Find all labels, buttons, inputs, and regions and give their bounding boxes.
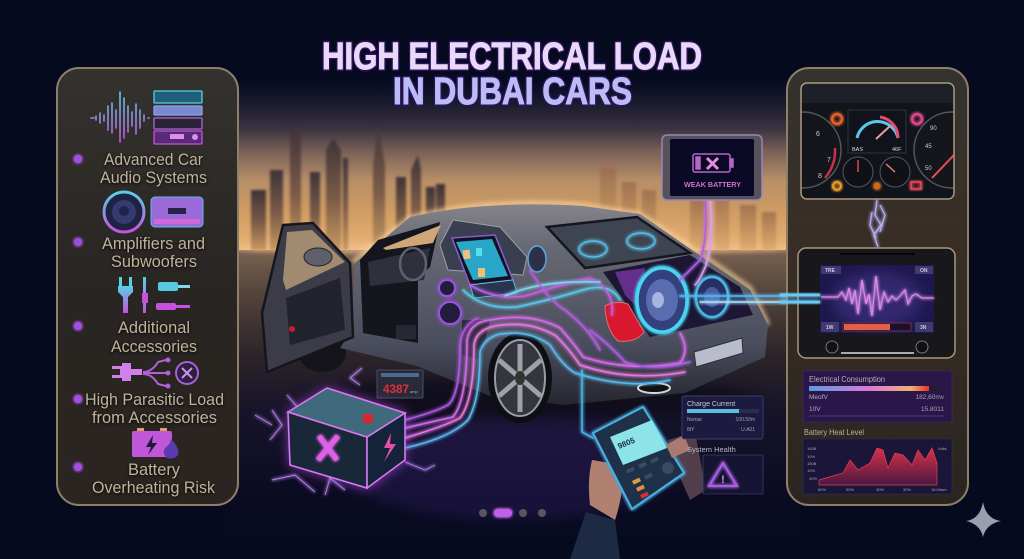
- instrument cluster: 90: [930, 126, 937, 132]
- progress bar: [843, 323, 911, 331]
- panel: causes list: [57, 68, 238, 505]
- electrical consumption card: Electrical Consumption: [809, 374, 885, 384]
- electric sparks: [255, 368, 435, 495]
- waveform: [821, 276, 934, 316]
- icon: sound wave: [91, 92, 149, 142]
- battery heat chart: 50%: [846, 487, 854, 492]
- watermark sparkle: [966, 502, 1001, 537]
- panel: dashboard diagnostics: [778, 67, 969, 506]
- car body: [340, 204, 768, 405]
- tool screen: [610, 420, 667, 465]
- icon: overheating battery: [132, 428, 178, 459]
- screen buttons: 3N: [920, 325, 927, 331]
- title: IN DUBAI CARS: [393, 71, 632, 113]
- windshield view: [383, 225, 441, 250]
- battery heat chart: 10%: [807, 454, 815, 459]
- label: battery overheating risk: [92, 460, 215, 497]
- label: battery overheating risk: Overheating Risk: [92, 478, 215, 497]
- charge current panel: U.A01: [741, 427, 755, 433]
- electrical consumption card: MeofV: [809, 394, 828, 401]
- tool body: [593, 407, 684, 509]
- door trim: [286, 278, 345, 345]
- battery heat heading: Battery Heat Level: [804, 428, 864, 437]
- left gauge: [802, 111, 842, 189]
- rear body glow: [353, 203, 768, 325]
- battery heat chart: 60%: [818, 487, 826, 492]
- warning lights: [832, 114, 842, 124]
- label: high parasitic load: [85, 390, 224, 427]
- label: high parasitic load: High Parasitic Load: [85, 390, 224, 409]
- head unit controls: [826, 341, 838, 353]
- electrical consumption card: 15.8011: [921, 406, 944, 413]
- battery heat chart: Volts: [938, 446, 947, 451]
- tablet screen: [452, 235, 517, 298]
- charge current panel: 8tY: [687, 427, 695, 433]
- diagnostic tool and hands: [570, 407, 706, 559]
- car battery: [255, 368, 435, 495]
- center console: [396, 325, 416, 339]
- system health panel: !: [721, 474, 725, 486]
- head unit screen: [820, 265, 934, 333]
- label: battery overheating risk: Battery: [128, 460, 180, 479]
- door lower interior: [462, 320, 490, 360]
- label: additional accessories: Accessories: [111, 337, 197, 356]
- battery heat chart: 10%: [807, 468, 815, 473]
- license plate: [694, 338, 743, 367]
- label: advanced car audio systems: Advanced Car: [104, 150, 203, 169]
- system health panel: System Health: [687, 445, 736, 454]
- battery case: [288, 412, 367, 488]
- screen buttons: 1W: [826, 325, 834, 331]
- title: HIGH ELECTRICAL LOAD: [322, 36, 702, 78]
- head unit: [798, 248, 955, 358]
- label: bullet 4: [74, 395, 82, 403]
- rear wheel: [488, 333, 552, 423]
- trunk opening: [603, 255, 753, 337]
- battery heat chart: 150B: [807, 461, 817, 466]
- exhaust: [638, 383, 670, 393]
- battery heat chart: 30%: [903, 487, 911, 492]
- instrument cluster: 8: [818, 173, 822, 180]
- trunk subwoofers: [637, 268, 728, 332]
- city skyline: [251, 122, 776, 250]
- label: amplifiers and subwoofers: [102, 234, 205, 271]
- lightning arc: [870, 200, 885, 247]
- diagnostic tool and hands: 9805: [616, 436, 637, 451]
- dashboard: [368, 248, 430, 286]
- electric beam: [780, 295, 820, 302]
- electrical consumption card: 10V: [809, 406, 821, 413]
- electrical consumption card: 182,60mv: [915, 394, 945, 401]
- icon: speaker: [104, 192, 144, 232]
- title: HIGH ELECTRICAL LOAD: [322, 36, 702, 78]
- battery heat chart: 40%: [809, 476, 817, 481]
- left hand: [589, 460, 623, 520]
- title: [322, 36, 702, 113]
- battery heat chart: 16:00am: [931, 487, 947, 492]
- lightning bolt: [384, 433, 396, 462]
- door speakers: [439, 280, 461, 324]
- voltage meter: [377, 370, 423, 398]
- icon: warning triangle: [709, 463, 737, 486]
- instrument cluster: BAS: [852, 147, 863, 153]
- thumb: [666, 435, 690, 458]
- battery heat chart: [803, 439, 952, 494]
- tool keypad: [626, 457, 674, 499]
- center display: [848, 110, 906, 153]
- screen buttons: TRE: [825, 268, 836, 274]
- open front door: [262, 223, 353, 372]
- charge current panel: Nomar: [687, 417, 702, 423]
- title: IN DUBAI CARS: [393, 71, 632, 113]
- car: [262, 203, 768, 423]
- right hand: [668, 432, 706, 500]
- link arc: [876, 358, 878, 371]
- instrument cluster: 45: [925, 144, 932, 150]
- icon: amplifier: [151, 197, 203, 227]
- screen buttons: ON: [920, 268, 928, 274]
- door window: [283, 230, 345, 290]
- label: amplifiers and subwoofers: Amplifiers and: [102, 234, 205, 253]
- instrument cluster: 46F: [892, 147, 902, 153]
- label: amplifiers and subwoofers: Subwoofers: [111, 252, 197, 271]
- front wheel: [298, 332, 346, 372]
- instrument cluster: [802, 84, 954, 198]
- small gauges: [843, 157, 873, 187]
- rear window speakers: [579, 233, 655, 257]
- charge current panel: Charge Current: [687, 401, 735, 408]
- right gauge: [913, 111, 954, 189]
- label: bullet 2: [74, 238, 82, 246]
- label: advanced car audio systems: Audio Systems: [100, 168, 207, 187]
- battery heat chart: 40%: [876, 487, 884, 492]
- label: high parasitic load: from Accessories: [92, 408, 217, 427]
- cabin opening: [360, 222, 440, 343]
- x mark: [318, 436, 338, 460]
- icon: empty battery with x: [693, 154, 733, 172]
- rear side window: [440, 220, 527, 275]
- voltage meter: 4387: [383, 382, 409, 396]
- panel: weak battery warning: WEAK BATTERY: [684, 180, 741, 189]
- battery heat chart: 150B: [807, 446, 817, 451]
- rear window: [547, 217, 690, 268]
- label: bullet 1: [74, 155, 82, 163]
- panel: weak battery warning: [662, 135, 762, 200]
- icon: plugs and connectors: [118, 277, 190, 313]
- electrical consumption card: [803, 371, 952, 422]
- charge current panel: [682, 396, 763, 439]
- steering wheel: [400, 248, 426, 280]
- label: bullet 3: [74, 322, 82, 330]
- label: bullet 5: [74, 463, 82, 471]
- instrument cluster: 6: [816, 131, 820, 138]
- wiring harness: [405, 200, 788, 448]
- instrument cluster: 50: [925, 166, 932, 172]
- car shadow: [300, 376, 760, 420]
- side mirror: [304, 248, 332, 266]
- label: advanced car audio systems: [100, 150, 207, 187]
- label: additional accessories: Additional: [118, 318, 190, 337]
- instrument cluster: 7: [827, 157, 831, 164]
- icon: audio rack: [154, 91, 202, 144]
- taillight: [605, 302, 644, 341]
- pillar speaker: [528, 246, 546, 272]
- system health panel: [687, 445, 763, 494]
- charge current panel: 100.50m: [736, 417, 755, 423]
- terminal: [363, 414, 373, 423]
- pagination dots: [479, 509, 546, 517]
- forearm: [570, 512, 620, 559]
- screen buttons: [821, 266, 933, 332]
- label: additional accessories: [111, 318, 197, 356]
- icon: parasitic plug: [112, 358, 198, 388]
- voltage meter: amp: [410, 389, 419, 394]
